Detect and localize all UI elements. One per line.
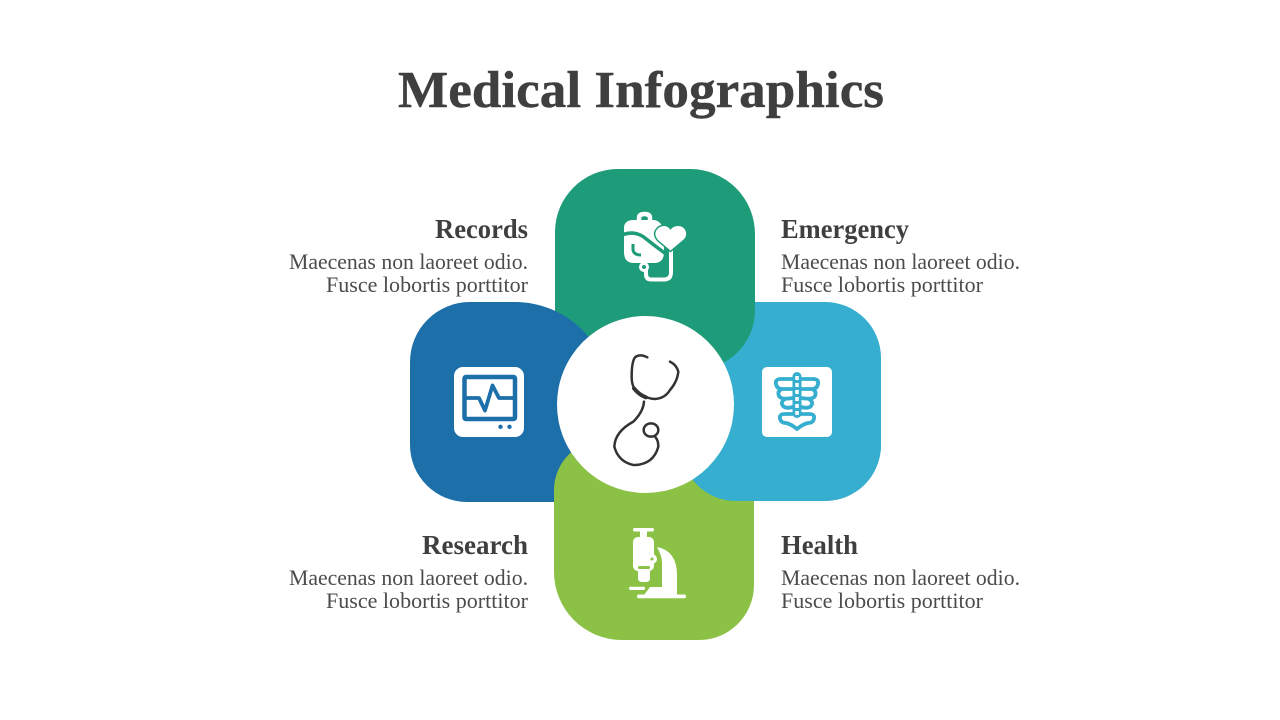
- icon: heart monitor: [454, 367, 524, 437]
- icon: spine x-ray: [762, 367, 832, 437]
- title: Medical Infographics: [398, 62, 884, 119]
- text block: Health: Health: [781, 530, 858, 560]
- text block: Emergency: [781, 214, 1020, 297]
- text block: Records: Maecenas non laoreet odio.: [289, 249, 528, 274]
- text block: Health: [781, 530, 1020, 613]
- text block: Emergency: Fusce lobortis porttitor: [781, 272, 984, 297]
- text block: Health: Fusce lobortis porttitor: [781, 588, 984, 613]
- panel: lime petal: [554, 440, 754, 640]
- icon: microscope: [629, 528, 686, 598]
- text block: Emergency: Emergency: [781, 214, 909, 244]
- text block: Records: Records: [435, 214, 528, 244]
- icon: stethoscope: [614, 355, 678, 465]
- text block: Research: Fusce lobortis porttitor: [326, 588, 529, 613]
- panel: teal petal: [681, 302, 881, 501]
- icon: IV bag with heart: [622, 214, 686, 280]
- text block: Research: [289, 530, 529, 613]
- panel: green petal: [555, 169, 755, 370]
- text block: Health: Maecenas non laoreet odio.: [781, 565, 1020, 590]
- text block: Research: Maecenas non laoreet odio.: [289, 565, 528, 590]
- panel: teal petal overlap: [692, 446, 881, 501]
- center circle: [557, 316, 734, 493]
- panel: blue petal: [410, 302, 610, 502]
- text block: Records: Fusce lobortis porttitor: [326, 272, 529, 297]
- text block: Emergency: Maecenas non laoreet odio.: [781, 249, 1020, 274]
- text block: Research: Research: [422, 530, 528, 560]
- text block: Records: [289, 214, 529, 297]
